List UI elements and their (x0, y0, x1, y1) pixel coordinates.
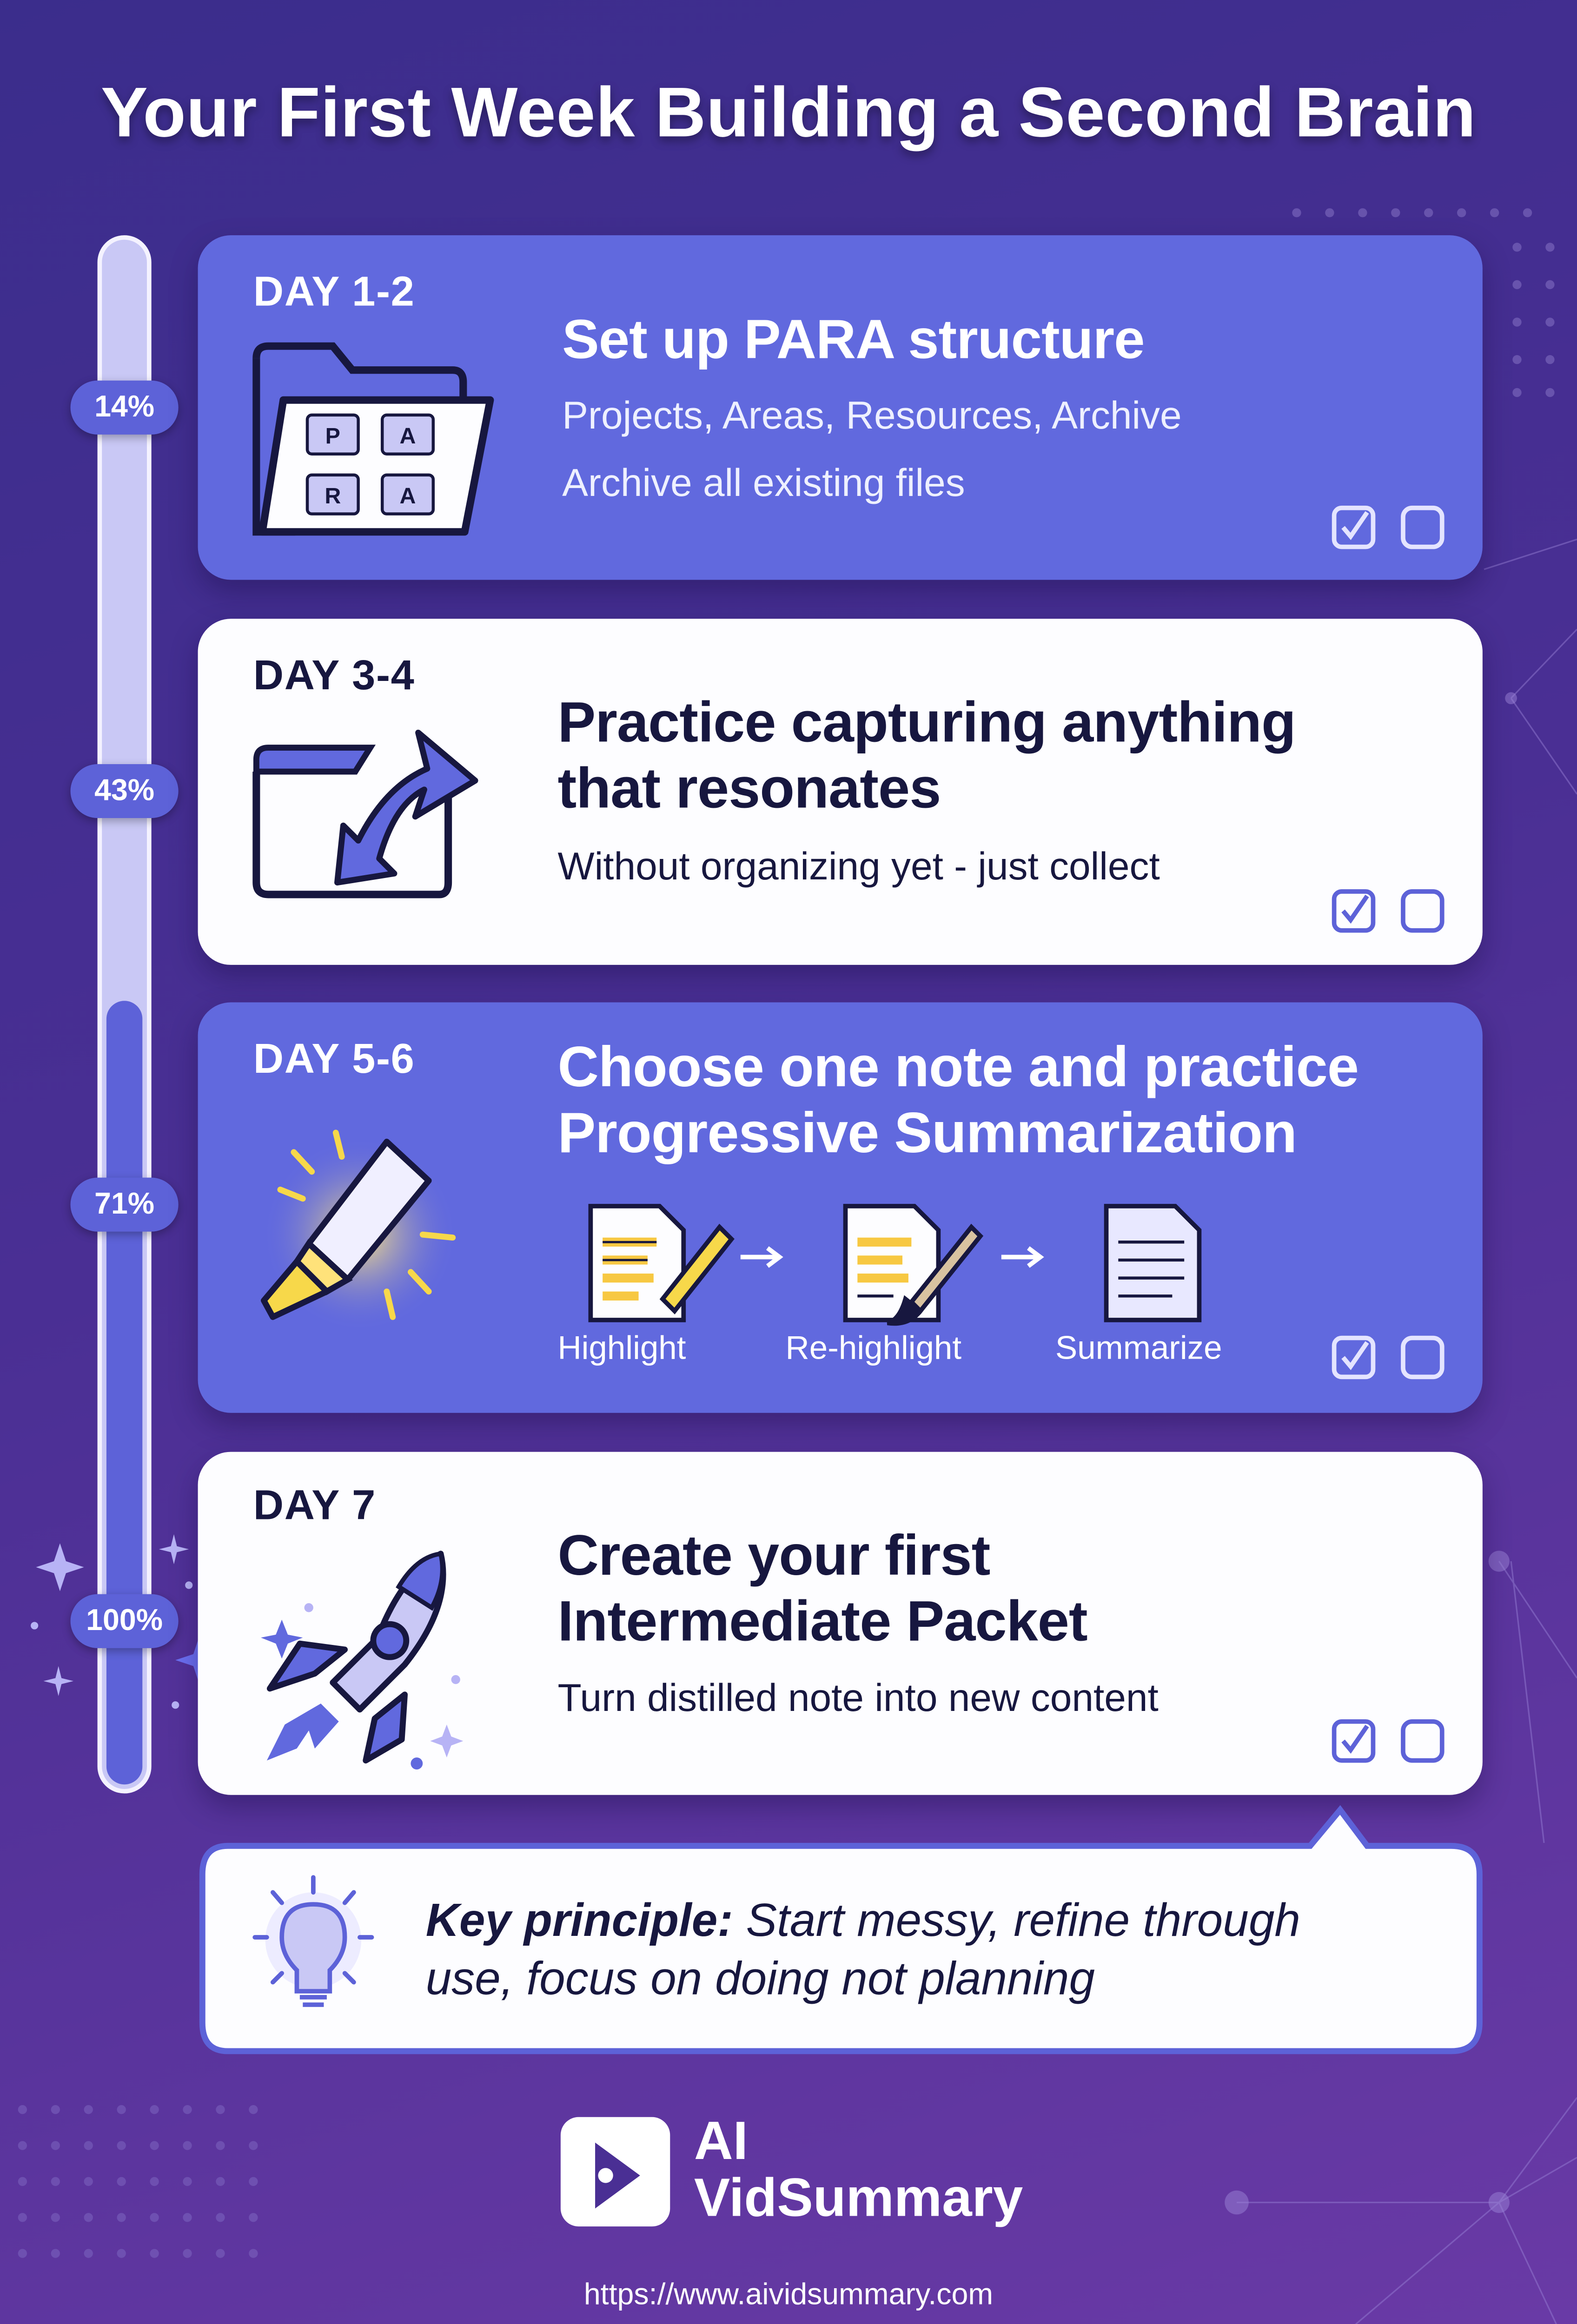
badge 43% (71, 764, 179, 818)
icon: PARA folder: R (325, 483, 341, 508)
logo: AI (694, 2110, 748, 2171)
badge 14%: 14% (94, 391, 154, 424)
heading (557, 1524, 1087, 1656)
card: day 3-4: DAY 3-4 (253, 652, 415, 698)
checkboxes (1331, 1335, 1445, 1380)
checkboxes (1331, 889, 1445, 933)
badge 100% (71, 1594, 179, 1648)
heading (557, 1035, 1358, 1167)
icon: rocket (255, 1545, 480, 1769)
checkboxes (1331, 1718, 1445, 1763)
card: day 5-6 (198, 1003, 1483, 1413)
title: Your First Week Building a Second Brain (101, 72, 1476, 152)
badge 43%: 43% (94, 775, 154, 807)
heading: that resonates (557, 758, 941, 821)
badge 100%: 100% (86, 1604, 163, 1637)
heading: Create your first (557, 1525, 990, 1588)
icon: highlighter (243, 1115, 483, 1340)
card: day 5-6: DAY 5-6 (253, 1035, 415, 1082)
url: https://www.aividsummary.com (584, 2279, 993, 2312)
checkboxes (1331, 505, 1445, 550)
card: day 3-4 (198, 619, 1483, 965)
badge 71% (71, 1178, 179, 1232)
heading: Practice capturing anything (557, 692, 1296, 755)
subtext (562, 382, 1182, 517)
heading (557, 691, 1296, 823)
card: day 1-2: DAY 1-2 (253, 268, 415, 315)
subtext: Archive all existing files (562, 460, 965, 505)
process steps: highlight, re-highlight, summarize (557, 1197, 1262, 1385)
process steps: highlight, re-highlight, summarize: Summarize (1055, 1329, 1222, 1367)
subtext: Without organizing yet - just collect (557, 844, 1160, 889)
callout: key principle (198, 1804, 1484, 2056)
heading: Progressive Summarization (557, 1103, 1297, 1166)
logo: VidSummary (694, 2166, 1023, 2228)
badge 14% (71, 381, 179, 435)
heading: Intermediate Packet (557, 1591, 1087, 1654)
icon: PARA folder: P (325, 423, 340, 449)
subtext: Turn distilled note into new content (557, 1675, 1159, 1720)
sparkles near timeline (27, 1528, 237, 1716)
icon: PARA folder: A (400, 423, 416, 449)
card: day 7: DAY 7 (253, 1482, 376, 1528)
principle text: Key principle: Start messy, refine through use, focus on doing not planning (426, 1894, 1300, 2005)
icon: light bulb (243, 1871, 385, 2021)
process steps: highlight, re-highlight, summarize: Highlight (557, 1329, 686, 1367)
heading: Set up PARA structure (562, 309, 1145, 370)
heading: Choose one note and practice (557, 1037, 1358, 1100)
process steps: highlight, re-highlight, summarize: Re-highlight (786, 1329, 961, 1367)
subtext: Projects, Areas, Resources, Archive (562, 393, 1182, 437)
card: day 7 (198, 1452, 1483, 1795)
logo (559, 2116, 1024, 2235)
icon: PARA folder: A (400, 483, 416, 508)
badge 71%: 71% (94, 1188, 154, 1221)
timeline progress track (98, 235, 152, 1794)
icon: capture arrow (250, 726, 490, 904)
icon: PARA folder (250, 340, 505, 542)
card: day 1-2 (198, 235, 1483, 580)
